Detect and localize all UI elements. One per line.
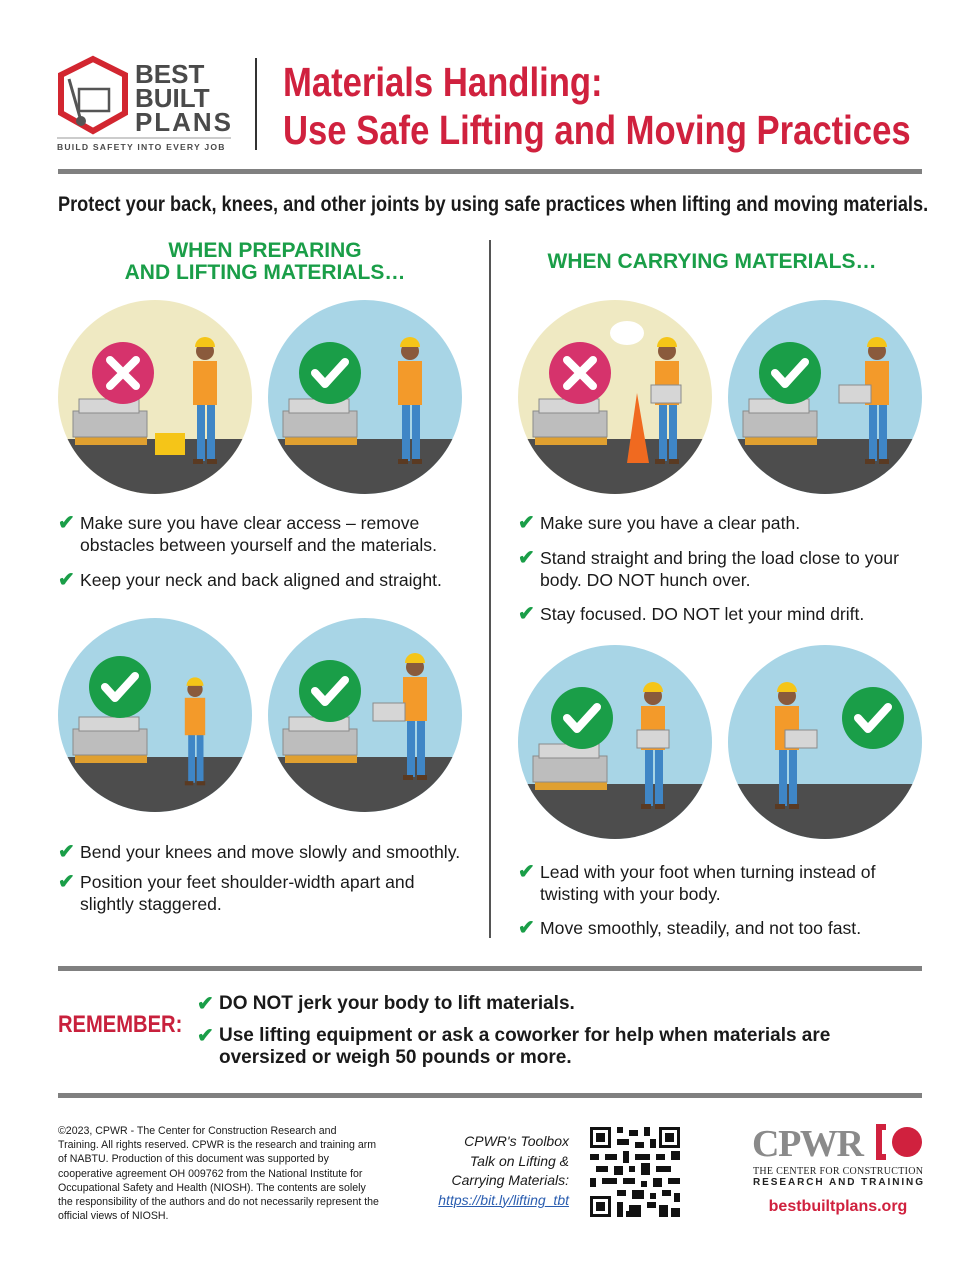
- circle 8: [725, 642, 925, 844]
- title: Materials Handling:: [283, 59, 603, 105]
- heading: carrying: WHEN CARRYING MATERIALS…: [548, 250, 876, 273]
- toolbox talk: Carrying Materials:: [452, 1172, 569, 1188]
- text: Bend your knees and move slowly and smoothly.: [80, 842, 460, 862]
- heading: preparing and lifting: AND LIFTING MATERIALS…: [125, 261, 405, 284]
- bullets left top: [58, 512, 442, 591]
- text: ✔: [58, 512, 75, 534]
- website: bestbuiltplans.org: [769, 1198, 907, 1215]
- remember bullets: [197, 993, 830, 1068]
- heading: preparing and lifting: [125, 239, 405, 284]
- remember: REMEMBER:: [58, 1011, 182, 1038]
- text: ✔: [58, 569, 75, 591]
- illustrations: [58, 300, 922, 839]
- text: Keep your neck and back aligned and straight.: [80, 570, 442, 590]
- bullets left bottom: [58, 841, 460, 914]
- cpwr logo: THE CENTER FOR CONSTRUCTION: [753, 1166, 923, 1177]
- toolbox talk: Talk on Lifting &: [470, 1152, 569, 1168]
- text: ✔: [518, 512, 535, 534]
- circle 5: bad carrying: [515, 297, 715, 499]
- toolbox talk: CPWR's Toolbox: [464, 1133, 569, 1149]
- logo: best built plans: BUILT: [135, 83, 210, 113]
- heading: preparing and lifting: WHEN PREPARING: [168, 239, 362, 262]
- text: ✔: [58, 871, 75, 893]
- bullets right top: [518, 512, 899, 625]
- text: DO NOT jerk your body to lift materials.: [219, 993, 575, 1014]
- footer copyright: ©2023, CPWR - The Center for Construction Research and Training. All rights reserved. CPWR is the research and training arm of NABTU. Production of this document was supported by cooperative agreement OH 009762 from the National Institute for Occupational Safety and Health (NIOSH). The contents are solely the responsibility of the authors and do not necessarily represent the official views of NIOSH.: [58, 1125, 379, 1222]
- text: ✔: [518, 547, 535, 569]
- circle 3: [55, 615, 255, 817]
- text: ✔: [197, 993, 214, 1015]
- toolbox talk: [438, 1133, 570, 1208]
- text: Make sure you have clear access – remove obstacles between yourself and the materials.: [80, 513, 437, 555]
- text: Use lifting equipment or ask a coworker for help when materials are oversized or weigh 50 pounds or more.: [219, 1025, 830, 1068]
- circle 4: [265, 615, 465, 817]
- text: Make sure you have a clear path.: [540, 513, 800, 533]
- circle 6: [725, 297, 925, 499]
- circle 2: [265, 297, 465, 499]
- text: Position your feet shoulder-width apart and slightly staggered.: [80, 872, 414, 914]
- logo: best built plans: BEST: [135, 59, 204, 89]
- toolbox talk: https://bit.ly/lifting_tbt: [438, 1192, 569, 1208]
- subtitle: Protect your back, knees, and other joints by using safe practices when lifting and moving materials.: [58, 193, 928, 216]
- logo: best built plans: PLANS: [135, 107, 231, 137]
- circle 7: [515, 642, 715, 844]
- qr code: [590, 1127, 680, 1217]
- bullets right bottom: [518, 861, 876, 939]
- cpwr logo: CPWR: [752, 1123, 865, 1165]
- title: Use Safe Lifting and Moving Practices: [283, 107, 911, 153]
- cpwr logo: RESEARCH AND TRAINING: [753, 1177, 923, 1188]
- logo: best built plans: [57, 56, 231, 152]
- text: Stand straight and bring the load close to your body. DO NOT hunch over.: [540, 548, 899, 590]
- text: ✔: [197, 1025, 214, 1047]
- logo: best built plans: BUILD SAFETY INTO EVERY JOB: [57, 142, 226, 152]
- circle 1: bad lifting: [55, 297, 255, 499]
- text: ✔: [58, 841, 75, 863]
- text: ✔: [518, 861, 535, 883]
- text: Stay focused. DO NOT let your mind drift.: [540, 604, 864, 624]
- text: ✔: [518, 917, 535, 939]
- text: Lead with your foot when turning instead of twisting with your body.: [540, 862, 875, 904]
- cpwr logo: [752, 1123, 923, 1188]
- text: ✔: [518, 603, 535, 625]
- title: [283, 59, 911, 153]
- text: Move smoothly, steadily, and not too fast.: [540, 918, 861, 938]
